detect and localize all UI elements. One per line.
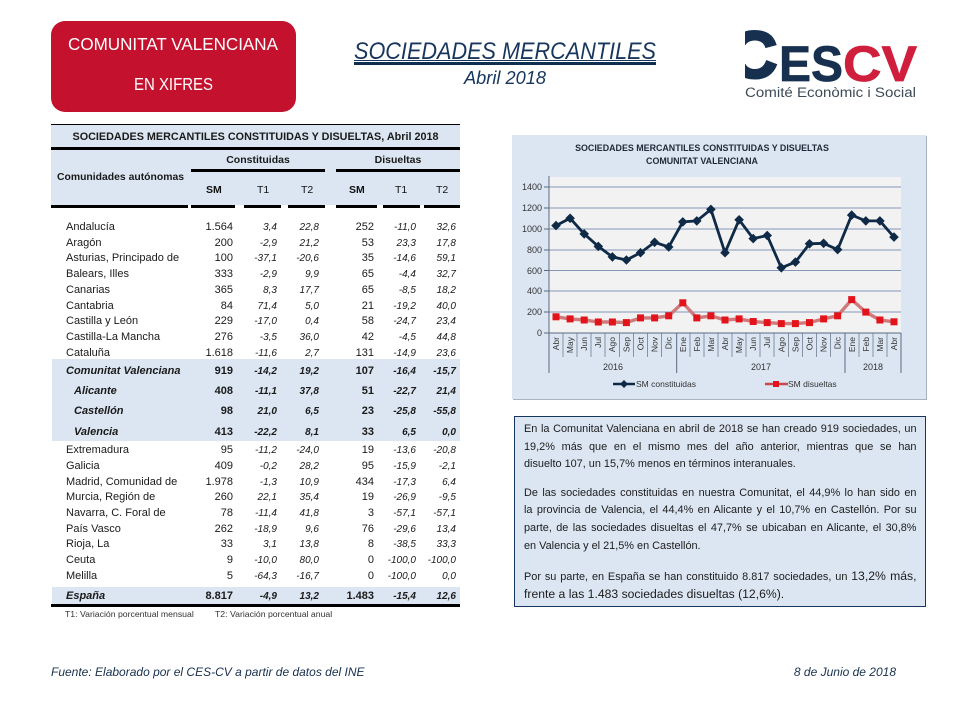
highlight band: Comunitat Valenciana xyxy=(52,359,460,441)
row: Extremadura: -24,0 xyxy=(296,445,319,456)
column header T1: T1 xyxy=(395,184,407,196)
row: Murcia: -26,9 xyxy=(393,492,416,503)
row: Navarra: -57,1 xyxy=(433,508,456,519)
x axis month labels: Mar xyxy=(706,337,716,352)
row: Madrid: 6,4 xyxy=(442,477,456,488)
row: Castilla-La Mancha: 42 xyxy=(362,331,374,343)
row: Andalucía: 22,8 xyxy=(300,222,319,233)
row: Murcia: 35,4 xyxy=(300,492,319,503)
summary paragraph 2: en Valencia y el 21,5% en Castellón. xyxy=(524,540,701,552)
row: Cantabria xyxy=(66,300,456,312)
logo: CES-CV: Comité Econòmic i Social xyxy=(745,85,916,100)
row: Asturias: 100 xyxy=(215,252,233,264)
row: Navarra: -57,1 xyxy=(393,508,416,519)
row: Madrid: -17,3 xyxy=(393,477,416,488)
row: Asturias: 35 xyxy=(362,252,374,264)
row: Ceuta: -10,0 xyxy=(254,555,277,566)
row: Cantabria: 84 xyxy=(221,300,233,312)
table footnote T2: T2: Variación porcentual anual xyxy=(215,609,332,619)
row: Balears: -2,9 xyxy=(260,269,277,280)
row: Aragón: Aragón xyxy=(66,237,101,249)
column group: Disueltas: Disueltas xyxy=(375,154,421,166)
row: Cantabria: 40,0 xyxy=(437,301,456,312)
x axis month labels: Jun xyxy=(579,337,589,351)
row: Aragón: 21,2 xyxy=(300,238,319,249)
text panel: summary xyxy=(514,416,926,607)
row: Murcia xyxy=(66,491,456,503)
row: Galicia: -2,1 xyxy=(439,461,456,472)
x axis year labels xyxy=(603,362,883,372)
row: Alicante: 51 xyxy=(362,385,374,397)
column group: Constituidas: Constituidas xyxy=(226,154,290,166)
row: Valencia: 6,5 xyxy=(402,427,416,438)
row: Canarias: -8,5 xyxy=(399,285,416,296)
row: Andalucía: -11,0 xyxy=(394,222,416,233)
row: Comunitat Valenciana: 19,2 xyxy=(300,366,319,377)
row: Castilla y León: 229 xyxy=(215,315,233,327)
row: Cataluña xyxy=(66,347,456,359)
row: Comunitat Valenciana: -16,4 xyxy=(393,366,416,377)
logo: CES-CV xyxy=(745,30,918,100)
row: Balears: 333 xyxy=(215,268,233,280)
row: Balears: 9,9 xyxy=(305,269,319,280)
y axis xyxy=(522,182,542,338)
plot area xyxy=(549,177,901,333)
row: Ceuta: 0 xyxy=(368,554,374,566)
row: España xyxy=(66,590,456,602)
row: Galicia xyxy=(66,460,456,472)
x axis month labels: Ago xyxy=(607,337,617,352)
row: Extremadura: -20,8 xyxy=(433,445,456,456)
row: Balears: Balears, Illes xyxy=(66,268,129,280)
row: País Vasco: -18,9 xyxy=(254,524,277,535)
row: Castellón: 21,0 xyxy=(258,406,277,417)
row: Rioja: 33,3 xyxy=(437,539,456,550)
row: Asturias: Asturias, Principado de xyxy=(66,252,179,264)
row: Cantabria: 5,0 xyxy=(305,301,319,312)
row: Alicante xyxy=(74,385,456,397)
row: Castilla-La Mancha xyxy=(66,331,456,343)
main title with rule xyxy=(354,38,656,88)
summary paragraph 3: frente a las 1.483 sociedades disueltas (12,6%). xyxy=(524,586,784,600)
row: Cataluña: 23,6 xyxy=(437,348,456,359)
x axis month labels: Oct xyxy=(804,336,814,350)
column header SM: SM xyxy=(206,184,222,196)
row: Galicia: -0,2 xyxy=(260,461,277,472)
x axis month labels: Sep xyxy=(790,337,800,352)
row: Melilla: 0 xyxy=(368,570,374,582)
x axis month labels: Feb xyxy=(861,337,871,352)
row: Ceuta xyxy=(66,554,456,566)
x axis month labels: Abr xyxy=(551,337,561,350)
row: País Vasco xyxy=(66,523,456,535)
row: País Vasco: País Vasco xyxy=(66,523,121,535)
row: País Vasco: 13,4 xyxy=(437,524,456,535)
summary paragraph 2 xyxy=(524,486,916,552)
row: Galicia: 28,2 xyxy=(300,461,319,472)
row: Extremadura xyxy=(66,444,456,456)
x axis month labels: May xyxy=(734,336,744,353)
banner line 2: EN XIFRES xyxy=(134,74,213,94)
row: Cataluña: 131 xyxy=(356,347,374,359)
row: Castilla-La Mancha: -3,5 xyxy=(260,332,277,343)
logo: CES-CV: ES xyxy=(779,36,843,92)
row: Rioja: -38,5 xyxy=(393,539,416,550)
row: Madrid: Madrid, Comunidad de xyxy=(66,476,177,488)
x axis month labels: Jul xyxy=(762,337,772,348)
row: España: -15,4 xyxy=(393,591,416,602)
x axis month labels: Dic xyxy=(832,336,842,349)
legend: SM disueltas xyxy=(788,379,837,389)
row: Valencia: 33 xyxy=(362,426,374,438)
table title: SOCIEDADES MERCANTILES CONSTITUIDAS Y DISUELTAS, Abril 2018 xyxy=(73,131,438,143)
line chart panel xyxy=(512,135,927,400)
row: Valencia xyxy=(74,426,456,438)
row: Murcia: 22,1 xyxy=(258,492,277,503)
x axis month labels: Ene xyxy=(847,337,857,352)
summary paragraph 2: De las sociedades constituidas en nuestra Comunitat, el 44,9% lo han sido en xyxy=(524,486,916,498)
highlight band: España xyxy=(52,587,460,604)
row: Canarias: 8,3 xyxy=(263,285,277,296)
row: Rioja: 13,8 xyxy=(300,539,319,550)
row: España: 12,6 xyxy=(437,591,456,602)
row: Extremadura: -11,2 xyxy=(255,445,277,456)
row: Comunitat Valenciana: -15,7 xyxy=(433,366,456,377)
row: Madrid xyxy=(66,476,456,488)
row: Rioja: 33 xyxy=(221,538,233,550)
y axis: 1200 xyxy=(522,203,542,213)
row: Madrid: 1.978 xyxy=(205,476,233,488)
row: Galicia: Galicia xyxy=(66,460,100,472)
y axis: 200 xyxy=(527,307,542,317)
legend xyxy=(613,379,837,389)
row: Alicante: -22,7 xyxy=(393,386,416,397)
row: Valencia: 8,1 xyxy=(305,427,319,438)
row: Castellón: -25,8 xyxy=(393,406,416,417)
row: Ceuta: -100,0 xyxy=(388,555,416,566)
row: Asturias: 59,1 xyxy=(437,253,456,264)
row: Aragón: 200 xyxy=(215,237,233,249)
x axis year labels: 2016 xyxy=(603,362,623,372)
y axis: 800 xyxy=(527,245,542,255)
row: Navarra: 78 xyxy=(221,507,233,519)
row: Cataluña: 1.618 xyxy=(205,347,233,359)
x axis month labels: Nov xyxy=(818,336,828,352)
summary paragraph 3: Por su parte, en España se han constituido 8.817 sociedades, un 13,2% más, xyxy=(524,569,916,583)
row: Aragón: 23,3 xyxy=(397,238,416,249)
x axis month labels: Oct xyxy=(636,336,646,350)
row: Canarias: 18,2 xyxy=(437,285,456,296)
row: Castilla-La Mancha: 276 xyxy=(215,331,233,343)
x axis month labels: Feb xyxy=(692,337,702,352)
row: Navarra xyxy=(66,507,456,519)
row: Valencia: Valencia xyxy=(74,426,118,438)
row: Castilla-La Mancha: 44,8 xyxy=(437,332,456,343)
row: Murcia: 19 xyxy=(362,491,374,503)
row: Cataluña: -14,9 xyxy=(393,348,416,359)
x axis month labels: May xyxy=(565,336,575,353)
x axis month labels: Jul xyxy=(593,337,603,348)
row: Balears: -4,4 xyxy=(399,269,416,280)
row: Asturias: -14,6 xyxy=(393,253,416,264)
row: Castilla y León: 58 xyxy=(362,315,374,327)
row: Canarias: 65 xyxy=(362,284,374,296)
column header T2: T2 xyxy=(436,184,448,196)
y axis: 1000 xyxy=(522,224,542,234)
series: SM disueltas xyxy=(556,300,894,324)
row: Ceuta: Ceuta xyxy=(66,554,95,566)
row: Alicante: -11,1 xyxy=(255,386,277,397)
row: Canarias xyxy=(66,284,456,296)
x axis month labels: Dic xyxy=(664,336,674,349)
row: Canarias: 17,7 xyxy=(300,285,319,296)
row: Navarra: -11,4 xyxy=(255,508,277,519)
column header SM: SM xyxy=(349,184,365,196)
table header band xyxy=(51,124,460,205)
row: Rioja: Rioja, La xyxy=(66,538,109,550)
row: Castellón: 6,5 xyxy=(305,406,319,417)
row: Murcia: 260 xyxy=(215,491,233,503)
row: Cataluña: Cataluña xyxy=(66,347,110,359)
row: Andalucía: 1.564 xyxy=(205,221,233,233)
row: Castilla-La Mancha: Castilla-La Mancha xyxy=(66,331,160,343)
row: Ceuta: -100,0 xyxy=(428,555,456,566)
row: País Vasco: -29,6 xyxy=(393,524,416,535)
row: País Vasco: 262 xyxy=(215,523,233,535)
x axis month labels: Sep xyxy=(622,337,632,352)
row: Castilla y León: 0,4 xyxy=(305,316,319,327)
row: Comunitat Valenciana: 919 xyxy=(215,365,233,377)
row: Aragón: 17,8 xyxy=(437,238,456,249)
row: Melilla: -16,7 xyxy=(296,571,319,582)
row: Castilla y León xyxy=(66,315,456,327)
row: Castilla y León: -17,0 xyxy=(254,316,277,327)
row: Andalucía: Andalucía xyxy=(66,221,115,233)
series: SM constituidas xyxy=(556,209,894,268)
column header T2: T2 xyxy=(301,184,313,196)
y axis: 1400 xyxy=(522,182,542,192)
row: Castilla y León: 23,4 xyxy=(437,316,456,327)
summary paragraph 2: la provincia de Valencia, el 44,4% en Alicante y el 10,7% en Castellón. Por su xyxy=(524,504,916,516)
row: España: 1.483 xyxy=(346,590,374,602)
chart title xyxy=(575,143,829,166)
row: Castellón: 98 xyxy=(221,405,233,417)
x axis month labels: Mar xyxy=(875,337,885,352)
x axis year labels: 2017 xyxy=(751,362,771,372)
row: Castellón xyxy=(74,405,456,417)
row: Andalucía: 32,6 xyxy=(437,222,456,233)
row: Castellón: -55,8 xyxy=(433,406,456,417)
row: Ceuta: 80,0 xyxy=(300,555,319,566)
source note: Fuente: Elaborado por el CES-CV a partir de datos del INE xyxy=(51,665,364,679)
row: Extremadura: 19 xyxy=(362,444,374,456)
row: Castilla y León: Castilla y León xyxy=(66,315,138,327)
table footnote T1: T1: Variación porcentual mensual xyxy=(65,609,194,619)
row: Extremadura: -13,6 xyxy=(393,445,416,456)
row: Canarias: 365 xyxy=(215,284,233,296)
x axis year labels: 2018 xyxy=(863,362,883,372)
row: Cantabria: Cantabria xyxy=(66,300,114,312)
row: Murcia: Murcia, Región de xyxy=(66,491,155,503)
row: Comunitat Valenciana: Comunitat Valenciana xyxy=(66,365,181,377)
x axis month labels: Jun xyxy=(748,337,758,351)
row: Comunitat Valenciana: -14,2 xyxy=(254,366,277,377)
row: Andalucía: 3,4 xyxy=(263,222,277,233)
row: Castellón: Castellón xyxy=(74,405,124,417)
row: Murcia: -9,5 xyxy=(439,492,456,503)
row: Comunitat Valenciana: 107 xyxy=(356,365,374,377)
row: España: -4,9 xyxy=(260,591,277,602)
row: Rioja: 3,1 xyxy=(263,539,277,550)
x axis month labels: Ago xyxy=(776,337,786,352)
x axis month labels xyxy=(551,336,899,353)
chart title: SOCIEDADES MERCANTILES CONSTITUIDAS Y DISUELTAS xyxy=(575,143,829,153)
row: Castilla-La Mancha: -4,5 xyxy=(399,332,416,343)
row: Alicante: Alicante xyxy=(74,385,117,397)
summary paragraph 2: parte, de las sociedades disueltas el 47,7% se ubicaban en Alicante, el 30,8% xyxy=(524,522,916,534)
row: Aragón: -2,9 xyxy=(260,238,277,249)
row: Cantabria: 71,4 xyxy=(258,301,277,312)
row: Navarra: 3 xyxy=(368,507,374,519)
subtitle: Abril 2018 xyxy=(463,68,546,88)
row: Madrid: 10,9 xyxy=(300,477,319,488)
row: Melilla xyxy=(66,570,456,582)
row: Cataluña: 2,7 xyxy=(305,348,319,359)
row: Alicante: 37,8 xyxy=(300,386,319,397)
row: Castellón: 23 xyxy=(362,405,374,417)
row: España: 13,2 xyxy=(300,591,319,602)
summary paragraph 1: 19,2% más que en el mismo mes del año anterior, mientras que se han xyxy=(524,441,916,453)
logo: CES-CV: CV xyxy=(843,36,918,92)
row: Cantabria: 21 xyxy=(362,300,374,312)
red banner: Comunitat Valenciana en xifres xyxy=(51,21,296,112)
row: Madrid: 434 xyxy=(356,476,374,488)
row: Madrid: -1,3 xyxy=(260,477,277,488)
row: Cataluña: -11,6 xyxy=(255,348,277,359)
row: Alicante: 21,4 xyxy=(437,386,456,397)
row: Alicante: 408 xyxy=(215,385,233,397)
row: Navarra: 41,8 xyxy=(300,508,319,519)
banner line 1: COMUNITAT VALENCIANA xyxy=(68,34,278,54)
row: Balears: 65 xyxy=(362,268,374,280)
row: Aragón xyxy=(66,237,456,249)
row: Melilla: Melilla xyxy=(66,570,97,582)
row: Rioja xyxy=(66,538,456,550)
row: Melilla: -100,0 xyxy=(388,571,416,582)
x axis month labels: Nov xyxy=(650,336,660,352)
row: Valencia: 0,0 xyxy=(442,427,456,438)
y axis: 400 xyxy=(527,286,542,296)
row: Navarra: Navarra, C. Foral de xyxy=(66,507,166,519)
y axis: 600 xyxy=(527,266,542,276)
row: Andalucía: 252 xyxy=(356,221,374,233)
row: Galicia: 95 xyxy=(362,460,374,472)
row: Galicia: -15,9 xyxy=(393,461,416,472)
row: Balears xyxy=(66,268,456,280)
x axis month labels: Ene xyxy=(678,337,688,352)
row: Cantabria: -19,2 xyxy=(393,301,416,312)
row: Melilla: 0,0 xyxy=(442,571,456,582)
row: Andalucía xyxy=(66,221,456,233)
row: Valencia: -22,2 xyxy=(254,427,277,438)
row: Castilla-La Mancha: 36,0 xyxy=(300,332,319,343)
row: Galicia: 409 xyxy=(215,460,233,472)
column header T1: T1 xyxy=(257,184,269,196)
row: Extremadura: 95 xyxy=(221,444,233,456)
row: País Vasco: 76 xyxy=(362,523,374,535)
x axis month labels: Abr xyxy=(889,337,899,350)
summary paragraph 1: En la Comunitat Valenciana en abril de 2018 se han creado 919 sociedades, un xyxy=(524,423,916,435)
x axis month labels: Abr xyxy=(720,337,730,350)
row header: Comunidades autónomas xyxy=(57,172,184,183)
summary paragraph 1: disuelto 107, un 15,7% menos en términos interanuales. xyxy=(524,458,796,470)
y axis: 0 xyxy=(537,328,542,338)
row: Valencia: 413 xyxy=(215,426,233,438)
row: Asturias xyxy=(66,252,456,264)
row: Canarias: Canarias xyxy=(66,284,110,296)
row: Melilla: 5 xyxy=(227,570,233,582)
chart title: COMUNITAT VALENCIANA xyxy=(646,156,759,166)
row: España: 8.817 xyxy=(205,590,233,602)
row: Asturias: -20,6 xyxy=(296,253,319,264)
row: España: España xyxy=(66,590,105,602)
row: Comunitat Valenciana xyxy=(66,365,456,377)
row: Extremadura: Extremadura xyxy=(66,444,129,456)
row: Rioja: 8 xyxy=(368,538,374,550)
row: Aragón: 53 xyxy=(362,237,374,249)
summary paragraph 1 xyxy=(524,423,916,470)
row: Ceuta: 9 xyxy=(227,554,233,566)
row: Castilla y León: -24,7 xyxy=(393,316,416,327)
row: País Vasco: 9,6 xyxy=(305,524,319,535)
row: Asturias: -37,1 xyxy=(254,253,277,264)
row: Balears: 32,7 xyxy=(437,269,456,280)
date: 8 de Junio de 2018 xyxy=(794,665,896,679)
legend: SM constituidas xyxy=(636,379,696,389)
row: Melilla: -64,3 xyxy=(254,571,277,582)
